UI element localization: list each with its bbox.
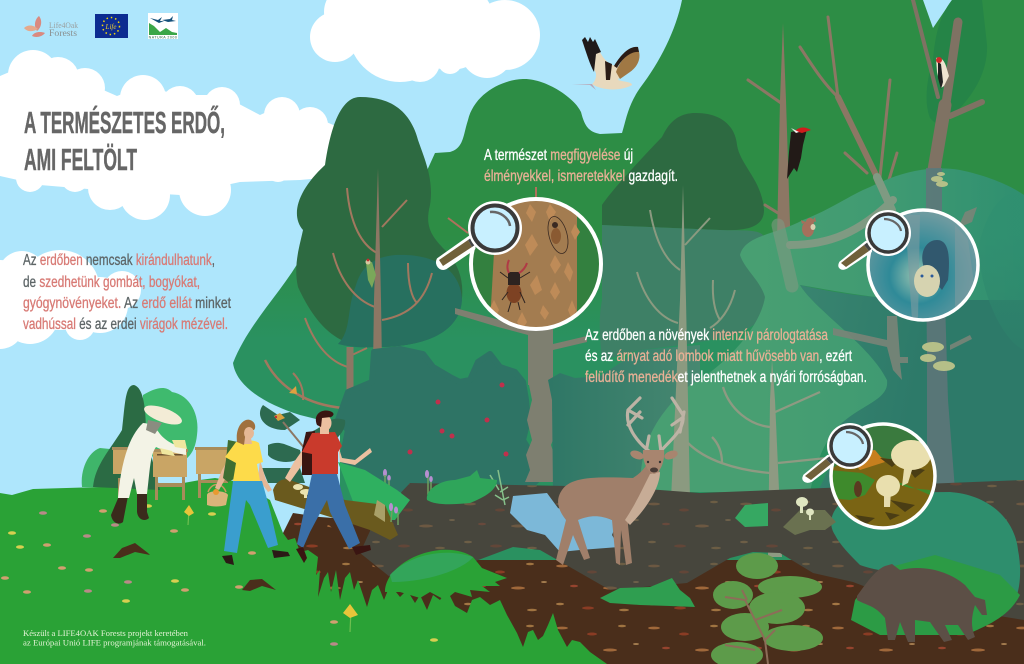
pond [510,493,619,552]
hive 2 [152,449,188,500]
magnifier glass 2 [840,210,911,268]
magnifier glass 1 [438,201,522,267]
birds [366,37,949,288]
berries [408,382,508,456]
bird on small tree [274,413,285,421]
sapling branches [725,590,782,664]
woman: shoes [222,550,290,565]
deer: antlers [627,398,684,452]
log end [374,500,385,522]
green bush behind man [338,462,410,520]
beekeeper: veil [146,420,162,434]
text block: forest gifts: Az erdőben nemcsak kirándulhatunk, [23,252,215,269]
text block: forest gifts: de szedhetünk gombát, bogyókat, [23,274,200,291]
logo: Natura 2000: NATURA 2000 [149,36,177,40]
magnifier circle: owl in tree hollow [868,210,978,320]
floor speckles [360,480,1024,620]
cloud: title background [0,50,368,220]
plant: fern on floor [490,470,509,505]
deer [556,398,684,565]
forest canopy background [233,0,1024,664]
cloud: body text background [0,250,141,349]
footer credit: az Európai Unió LIFE programjának támogatásával. [23,638,206,648]
beekeeper: gloves [160,440,187,456]
beekeeper: suit [118,423,186,498]
mushrooms small [796,497,814,520]
magnifier circle: beetles on trunk [471,199,601,340]
footer credit: Készült a LIFE4OAK Forests projekt keretében [23,628,189,638]
bush: boar background green [851,555,1020,635]
tree branches behind circle [448,187,606,254]
tree: top-right trunk [913,0,982,170]
mushroom scene [830,425,935,525]
meadow flower dots [1,504,438,646]
logo: EU LIFE flag: Life [105,23,116,31]
text block: cooling refuge [585,327,867,386]
tree: fogged right trunk [688,360,827,557]
walker: woman [207,420,290,565]
circle outline [868,210,978,320]
dark tree centre right [602,113,764,230]
deer: body [556,462,660,565]
cloud: top centre [310,0,540,82]
deer: chest [625,472,660,525]
dark tree left [296,97,462,347]
bright green meadow [0,478,607,664]
fog: centre body [600,225,765,360]
fog: right edge shading [979,193,1024,350]
logo: Life4Oak Forests: Life4Oak [49,20,79,30]
beetle: longhorn [548,216,568,254]
foreground soil speckles [283,513,1024,664]
man: head and hair [316,411,334,434]
bush: boar background teal [831,492,1020,600]
bush: floor green [427,470,497,504]
woman: backpack [223,440,238,482]
woman: shirt [225,440,263,481]
logo: Life4Oak Forests [24,16,79,39]
walker: man [285,411,372,563]
plant: purple flowers [383,469,433,498]
text block: forest gifts [23,252,231,333]
beekeeper: hat [142,402,184,428]
text block: cooling refuge: Az erdőben a növények intenzív párologtatása [585,327,828,344]
magnifier glass 3 [804,423,873,481]
beetle: stag beetle [500,260,530,312]
circle outline [831,424,935,528]
man: arms [285,445,372,482]
branches seen through fog [778,177,893,286]
beekeeper [111,402,187,524]
footer credit [23,628,206,648]
tree: bare tree with woodpecker [748,17,897,286]
woman: arms [215,460,272,492]
animal: squirrel [801,217,816,237]
teal canopy overlap [338,255,462,347]
forest floor fogged [360,480,1024,620]
text block: forest gifts: gyógynövényeket. Az erdő ellát minket [23,295,231,312]
man: shirt [302,432,342,474]
bush: teal right [548,345,700,492]
woman: basket [207,484,228,506]
beekeeper: boots [111,494,149,524]
magnifier circle: mushrooms [830,424,935,528]
bird: spotted woodpecker [936,57,949,89]
text block: cooling refuge: felüdítő menedéket jelenthetnek a nyári forróságban. [585,369,867,386]
bird: black woodpecker [787,128,811,179]
right background tree [927,0,987,124]
bush: foreground meadow tuft [385,550,507,600]
foreground sapling [711,553,823,664]
background shrubs behind beehives [82,385,198,490]
bush: small with mushrooms [783,510,836,535]
wild boar [857,564,987,642]
text block: observing nature: A természet megfigyelése új [484,147,633,164]
title: A TERMÉSZETES ERDŐ, [24,104,225,140]
tree: right grey trunks [833,168,977,492]
trunk lower part in front of bush [525,380,557,482]
deer: head [629,449,679,474]
trunk: main grey [926,168,955,492]
trunk: second grey with branches [833,207,977,380]
small tree behind walkers [260,386,345,483]
owl scene [905,215,975,320]
tree: left trunk with branches [265,168,432,497]
beetle scene [490,201,580,327]
text block: observing nature [484,147,678,185]
logo: EU LIFE flag [95,14,128,38]
hive 3 [195,447,231,498]
sapling foliage [711,553,823,664]
circle outline [471,199,601,329]
woman: head and hair [237,420,255,445]
text block: observing nature: élményekkel, ismeretekkel gazdagít. [484,168,678,185]
bush: low green near deer [735,503,768,527]
upper trees trunks [748,0,982,286]
tree: fogged centre trunk [637,185,735,500]
low green patch with leaves [600,578,695,607]
bird: flying hawk [572,37,639,90]
plant: purple flowers by log [389,503,398,525]
bush: teal left [338,349,537,489]
forest floor base: brown [283,513,1024,664]
man: trousers [297,474,360,549]
text block: forest gifts: vadhússal és az erdei virágok mézével. [23,316,228,333]
logo: Life4Oak Forests: Forests [49,29,77,39]
woman: trousers [224,481,278,553]
tree: central oak trunk [455,308,587,385]
right teal background [800,285,1024,495]
title [24,104,225,177]
man: backpack [302,431,315,475]
man: shoes [296,545,371,563]
title: AMI FELTÖLT [24,142,137,177]
log fungi [293,484,312,498]
fallen log [273,479,398,540]
bird on branch [289,386,297,394]
hive 1 [112,447,147,500]
text block: cooling refuge: és az árnyat adó lombok miatt hűvösebb van, ezért [585,348,852,365]
molehills [113,543,276,591]
fog: large lower blob [640,168,1024,492]
logo: Natura 2000 [148,13,178,40]
shelf fungi [920,172,955,371]
bird: green woodpecker [366,259,376,288]
yellow flowers [184,505,358,632]
beehives [112,447,231,500]
logos [24,13,178,40]
